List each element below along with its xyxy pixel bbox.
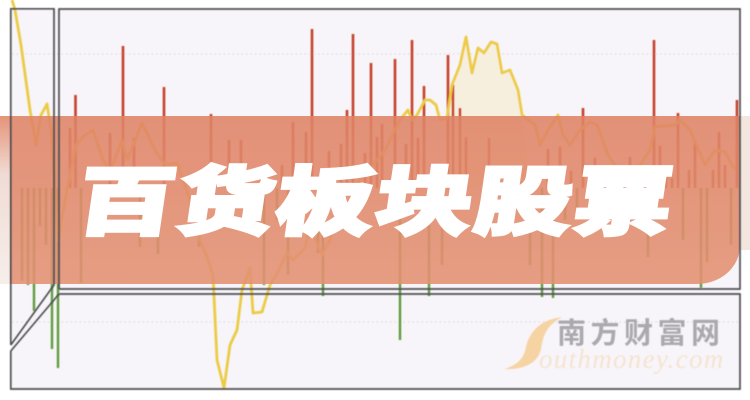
watermark logo xyxy=(504,317,725,374)
orange title band xyxy=(10,116,740,284)
left edge strip of band xyxy=(0,116,11,284)
red positive bars xyxy=(70,29,737,188)
green negative bars xyxy=(22,188,731,368)
dotted grid lines xyxy=(12,54,738,322)
top-left narrow frame xyxy=(11,9,54,345)
title: 百货板块股票 xyxy=(72,161,680,245)
lower frame xyxy=(11,294,740,389)
watermark url: outhmoney.com xyxy=(539,344,725,374)
yellow line area fill xyxy=(447,37,530,188)
right edge strip of band xyxy=(740,116,750,250)
main upper frame xyxy=(59,9,740,289)
icon: S swoosh xyxy=(504,317,562,369)
watermark chinese name: 南方财富网 xyxy=(557,317,725,350)
